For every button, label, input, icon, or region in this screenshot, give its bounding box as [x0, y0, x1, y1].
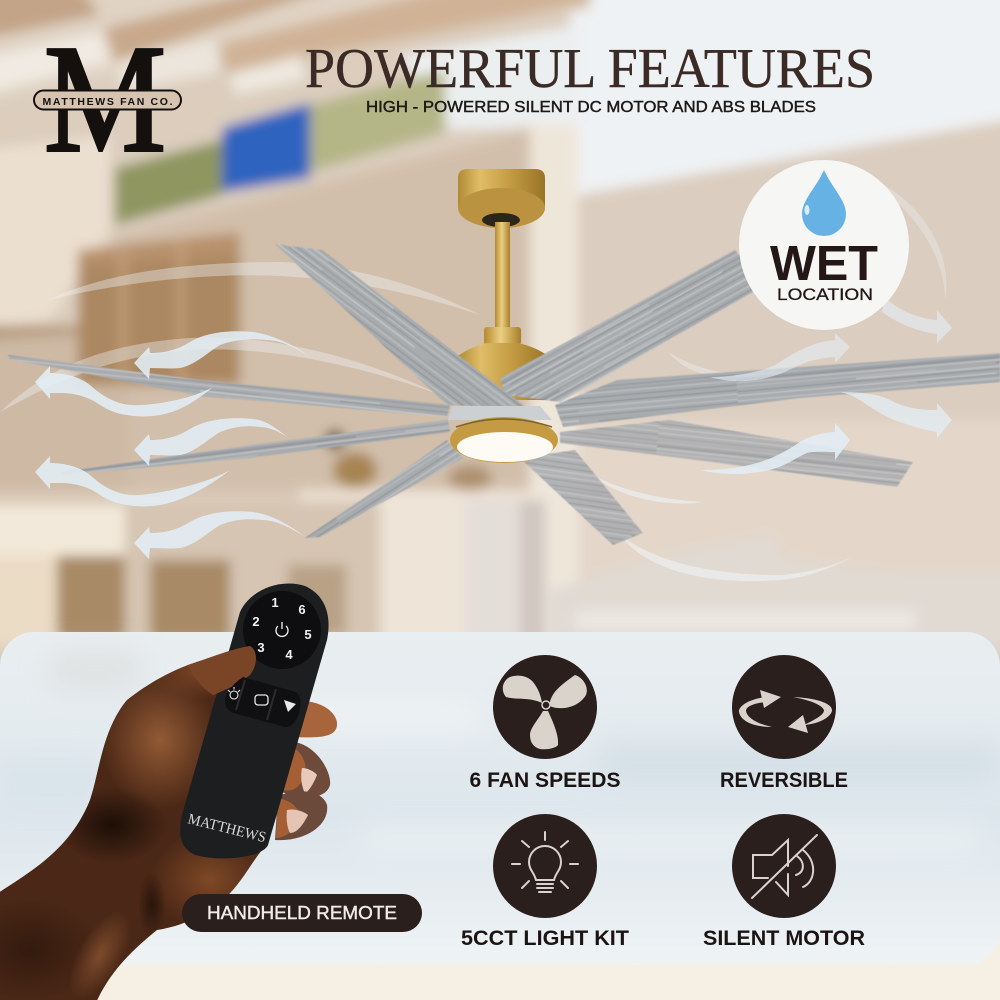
wind arrows: foreground — [35, 298, 952, 559]
icon: muted speaker — [752, 835, 817, 898]
badge: wet location: LOCATION — [777, 285, 873, 304]
remote numbers: 1 — [271, 595, 279, 610]
wind arrow left 5 — [134, 511, 305, 559]
feature: 6 fan speeds: 6 FAN SPEEDS — [470, 769, 620, 792]
wind arrow right 3 — [840, 392, 952, 438]
remote dial — [243, 591, 321, 669]
wind arrow left 1 — [134, 331, 310, 379]
remote numbers: 5 — [304, 627, 312, 642]
icon: fan — [503, 675, 587, 749]
feature: reversible: REVERSIBLE — [720, 769, 848, 792]
hand and forearm — [0, 651, 262, 1000]
wind arrow right 4 — [700, 423, 850, 474]
icon: rotation arrows — [739, 690, 832, 733]
canopy mount — [458, 169, 545, 228]
feature: silent motor — [703, 814, 865, 950]
hand holding remote — [0, 584, 337, 1000]
icon: water drop — [802, 170, 846, 236]
wind arrow left 2 — [35, 366, 213, 416]
remote numbers: 4 — [285, 647, 293, 662]
back fingers — [275, 701, 337, 840]
logo: MATTHEWS FAN CO. — [42, 96, 173, 108]
label pill: handheld remote — [182, 894, 422, 932]
feature: 5cct light kit: 5CCT LIGHT KIT — [461, 927, 629, 950]
remote buttons — [225, 677, 300, 727]
wind arrow left 3 — [134, 418, 290, 466]
feature: silent motor: SILENT MOTOR — [703, 927, 865, 950]
badge: wet location — [739, 160, 909, 330]
feature: reversible — [720, 655, 848, 792]
title: POWERFUL FEATURES — [305, 38, 875, 100]
wind arrows: faint arcs behind the fan — [0, 172, 946, 581]
wind arrow right 1 — [882, 298, 952, 343]
remote numbers — [252, 595, 312, 662]
label pill: handheld remote: HANDHELD REMOTE — [207, 903, 397, 923]
thumb — [188, 646, 256, 695]
icon: light bulb — [512, 832, 578, 892]
feature: 6 fan speeds — [470, 655, 620, 792]
motor bell — [458, 327, 548, 400]
ceiling fan — [8, 169, 1000, 545]
blades — [8, 244, 1000, 545]
remote brand: MATTHEWS — [186, 811, 268, 846]
badge: wet location: WET — [770, 237, 878, 291]
feature: 5cct light kit — [461, 814, 629, 950]
remote numbers: 6 — [298, 602, 306, 617]
panel: lower features background — [0, 632, 1000, 1000]
subtitle: HIGH - POWERED SILENT DC MOTOR AND ABS BLADES — [366, 99, 816, 116]
wind arrow left 4 — [35, 456, 230, 506]
wind arrow right 2 — [710, 333, 850, 381]
remote numbers: 2 — [252, 614, 260, 629]
remote numbers: 3 — [257, 640, 265, 655]
logo: M — [44, 14, 166, 184]
light housing — [448, 406, 558, 463]
remote body — [180, 584, 329, 858]
downrod — [495, 222, 510, 328]
